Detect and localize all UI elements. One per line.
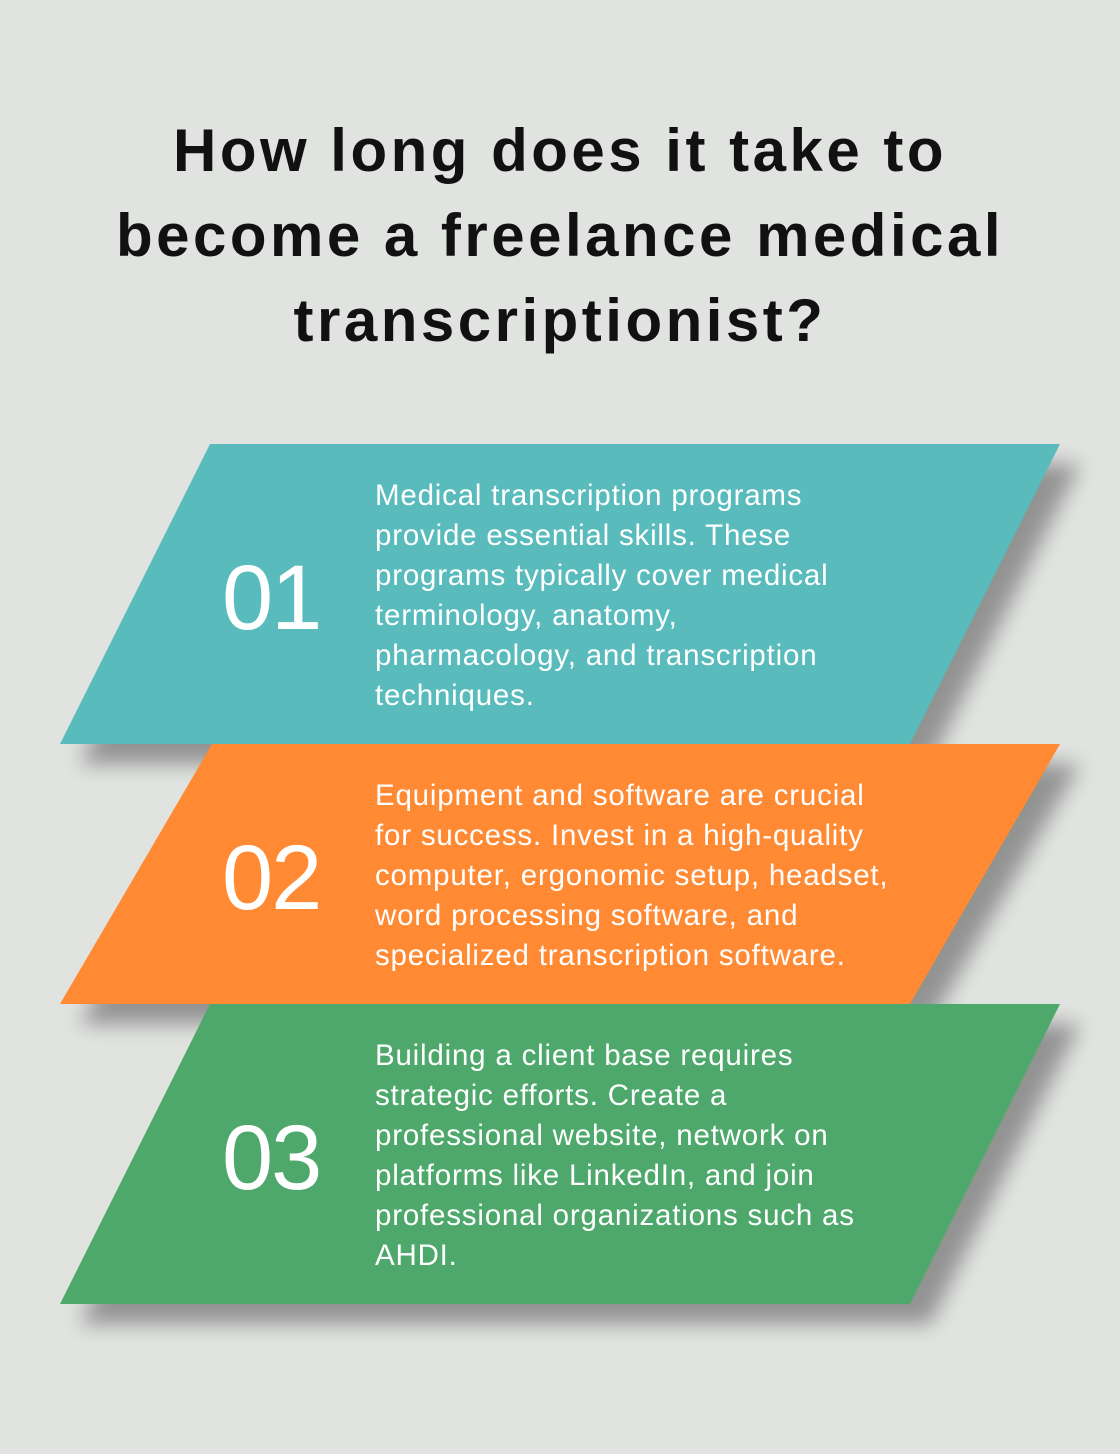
panel 1 text: techniques. <box>375 679 535 712</box>
title: How long does it take to <box>173 117 947 184</box>
panel 3 text: Building a client base requires <box>375 1039 793 1072</box>
panel 1 text: provide essential skills. These <box>375 519 791 552</box>
panel 3 text <box>375 1039 855 1272</box>
title <box>116 117 1004 354</box>
panel 1 text <box>375 479 828 712</box>
panel 3 text: AHDI. <box>375 1239 458 1272</box>
panel 1 text: Medical transcription programs <box>375 479 802 512</box>
panel 1 shape <box>60 444 1060 744</box>
panel 2 text: Equipment and software are crucial <box>375 779 865 812</box>
panel 3 text: professional website, network on <box>375 1119 829 1152</box>
panel 2 text <box>375 779 888 972</box>
panel 1 text: programs typically cover medical <box>375 559 828 592</box>
panel 3 shape <box>60 1004 1060 1304</box>
panel 2 text: for success. Invest in a high-quality <box>375 819 864 852</box>
panel 1 text: terminology, anatomy, <box>375 599 678 632</box>
panel 2 shape <box>60 744 1060 1004</box>
panel 1 text: pharmacology, and transcription <box>375 639 817 672</box>
title: become a freelance medical <box>116 202 1004 269</box>
panel 3 text: professional organizations such as <box>375 1199 855 1232</box>
panel 2 text: computer, ergonomic setup, headset, <box>375 859 888 892</box>
title: transcriptionist? <box>294 287 826 354</box>
panel 3 text: strategic efforts. Create a <box>375 1079 727 1112</box>
shadows <box>80 464 1080 1324</box>
panel 2 number: 02 <box>222 827 320 929</box>
panel 3 number: 03 <box>222 1107 320 1209</box>
panel 2 text: word processing software, and <box>375 899 798 932</box>
panel 2 text: specialized transcription software. <box>375 939 846 972</box>
panel 1 number: 01 <box>222 547 320 649</box>
panel 3 text: platforms like LinkedIn, and join <box>375 1159 815 1192</box>
